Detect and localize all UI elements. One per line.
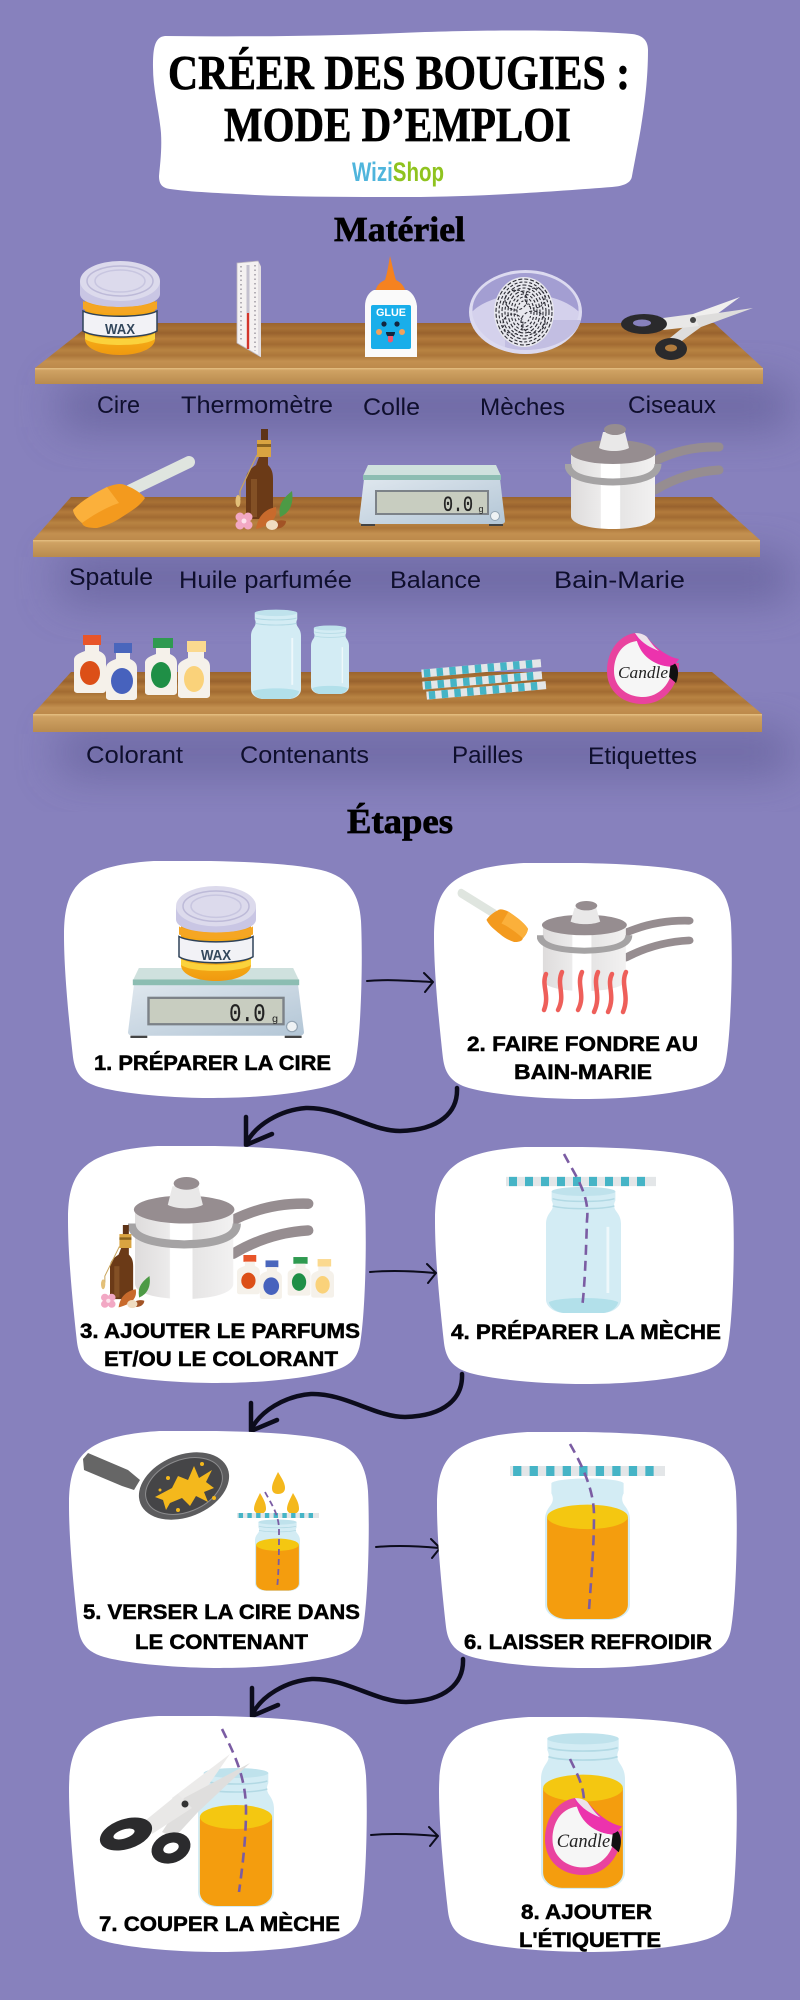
labels row 1: Thermomètre [181, 392, 333, 419]
labels row 2: Spatule [69, 564, 153, 591]
curved arrow 4 to 5 [251, 1374, 462, 1431]
labels row 1: Mèches [480, 394, 565, 421]
shelf 1 [35, 323, 763, 384]
icon: straw [506, 1177, 656, 1186]
step 5 card [69, 1431, 369, 1668]
arrow 7 to 8 [371, 1827, 438, 1846]
icon: wick [570, 1444, 594, 1610]
icon: candle label [607, 633, 679, 704]
labels row 3: Pailles [452, 742, 523, 769]
step 4 text: 4. PRÉPARER LA MÈCHE [451, 1321, 721, 1344]
icon: perfume oil [236, 429, 292, 530]
icon: glue [365, 256, 417, 357]
step 7 card [69, 1716, 367, 1952]
step 6 text: 6. LAISSER REFROIDIR [464, 1631, 712, 1654]
step 8 text: L'ÉTIQUETTE [519, 1929, 661, 1952]
step 2 text: 2. FAIRE FONDRE AU [467, 1033, 698, 1056]
icon: wax jar [176, 886, 256, 981]
icon: pot over flames [540, 901, 689, 991]
labels row 1: Colle [363, 394, 420, 421]
icon: flames [544, 972, 626, 1012]
step 8 text [519, 1901, 661, 1952]
step 1 text: 1. PRÉPARER LA CIRE [94, 1052, 331, 1075]
icon: small jar [311, 625, 349, 694]
step 2 card [434, 863, 732, 1099]
labels row 2: Bain-Marie [554, 567, 685, 594]
step 5 text: LE CONTENANT [135, 1631, 308, 1654]
step 8 card [439, 1717, 737, 1952]
icon: colorant bottles [237, 1255, 334, 1299]
icon: pan with melted wax [83, 1440, 239, 1532]
arrow 5 to 6 [376, 1539, 440, 1558]
step 5 text: 5. VERSER LA CIRE DANS [83, 1601, 360, 1624]
icon: scissors [621, 297, 753, 360]
labels row 3: Etiquettes [588, 743, 697, 770]
icon: candle label [545, 1798, 622, 1875]
icon: spatula [73, 462, 189, 528]
icon: wick [265, 1492, 279, 1589]
icon: double boiler [568, 424, 719, 529]
heading: Étapes: Étapes [347, 802, 453, 841]
icon: wax drops [254, 1472, 299, 1514]
step 5 text [83, 1601, 360, 1654]
shelf 3 shadow [60, 732, 790, 772]
icon: straws [421, 659, 546, 700]
icon: colorant bottles [74, 635, 210, 700]
arrow 3 to 4 [370, 1264, 436, 1283]
icon: straw [237, 1513, 319, 1518]
icon: spatula [461, 893, 528, 942]
logo: WiziShop: WiziShop [352, 157, 444, 187]
icon: large jar [251, 610, 301, 699]
labels row 3 [86, 742, 697, 770]
arrow 1 to 2 [367, 973, 433, 992]
icon: jar with wax [198, 1768, 274, 1907]
icon: thermometer [237, 261, 261, 357]
title panel [153, 30, 648, 197]
icon: perfume oil [101, 1225, 150, 1308]
icon: straw [510, 1466, 665, 1476]
labels row 2 [69, 564, 685, 594]
step 8 text: 8. AJOUTER [521, 1901, 652, 1924]
step 2 text: BAIN-MARIE [514, 1061, 652, 1084]
icon: jar with wax [545, 1479, 630, 1620]
step 3 text [80, 1320, 360, 1371]
step 3 text: ET/OU LE COLORANT [104, 1348, 338, 1371]
icon: pot [132, 1177, 308, 1299]
icon: scale [128, 968, 304, 1038]
labels row 2: Balance [390, 567, 481, 594]
labels row 2: Huile parfumée [179, 567, 352, 594]
icon: jar with wax [541, 1733, 625, 1889]
shelf 2 [33, 497, 760, 557]
labels row 3: Colorant [86, 742, 183, 769]
step 7 text: 7. COUPER LA MÈCHE [99, 1913, 340, 1936]
title text: MODE D’EMPLOI [224, 97, 571, 152]
step 1 card [64, 861, 362, 1098]
icon: jar [546, 1187, 621, 1313]
icon: wax jar [80, 261, 160, 355]
icon: scissors [96, 1754, 250, 1869]
labels row 1: Cire [97, 392, 140, 419]
step 6 card [437, 1432, 737, 1668]
step 4 card [435, 1147, 734, 1384]
title text: CRÉER DES BOUGIES : [168, 45, 630, 100]
labels row 1: Ciseaux [628, 392, 716, 419]
labels row 3: Contenants [240, 742, 369, 769]
curved arrow 2 to 3 [246, 1088, 457, 1145]
icon: wick [564, 1154, 587, 1308]
shelf 2 shadow [60, 556, 790, 600]
icon: scale [359, 465, 505, 526]
step 3 text: 3. AJOUTER LE PARFUMS [80, 1320, 360, 1343]
icon: wick [570, 1759, 584, 1802]
step 2 text [467, 1033, 698, 1084]
step 3 card [68, 1146, 366, 1383]
icon: jar with wax [255, 1520, 300, 1591]
icon: wick [222, 1729, 246, 1892]
heading: Matériel: Matériel [334, 210, 465, 249]
shelf 1 shadow [60, 384, 790, 428]
title text [168, 45, 630, 152]
icon: bowl of wicks [469, 270, 582, 354]
labels row 1 [97, 392, 716, 421]
curved arrow 6 to 7 [252, 1659, 463, 1716]
shelf 3 [33, 672, 762, 732]
